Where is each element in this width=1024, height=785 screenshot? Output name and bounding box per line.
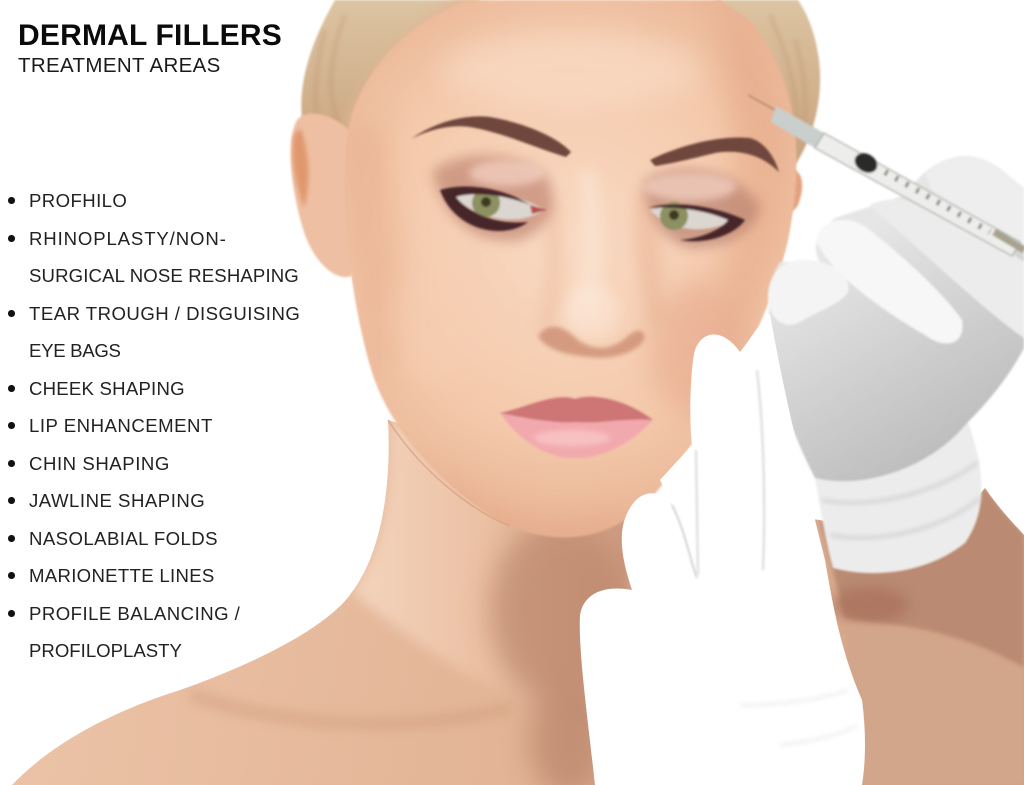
lower gloved hand	[580, 314, 865, 785]
title block	[18, 19, 282, 77]
list item: Lip enhancement: LIP ENHANCEMENT	[29, 415, 213, 436]
ear	[291, 114, 358, 277]
treatment areas list	[8, 190, 300, 661]
right eye makeup	[644, 169, 760, 248]
index finger	[816, 220, 962, 343]
list item: Chin shaping: CHIN SHAPING	[29, 453, 170, 474]
list item: Marionette lines: MARIONETTE LINES	[29, 565, 215, 586]
glove wrinkles	[740, 690, 858, 745]
list item: Rhinoplasty: RHINOPLASTY/NON-	[29, 228, 227, 249]
hair	[301, 0, 820, 165]
middle finger	[870, 200, 1024, 338]
treatment areas list: PROFILOPLASTY	[29, 640, 182, 661]
right eye	[648, 202, 745, 241]
nose	[538, 284, 644, 358]
treatment areas list: EYE BAGS	[29, 340, 121, 361]
lips	[500, 397, 653, 458]
left eye	[440, 186, 547, 231]
right ear	[780, 170, 802, 212]
heading: DERMAL FILLERS	[18, 19, 282, 52]
jaw line	[388, 420, 510, 526]
cuff	[815, 422, 982, 573]
list item: Profile balancing: PROFILE BALANCING /	[29, 603, 240, 624]
eyebrows	[411, 116, 779, 172]
upper gloved hand	[768, 156, 1024, 573]
body: neck, shoulders and chest	[12, 420, 1024, 785]
top finger	[925, 157, 1024, 245]
thumb	[768, 260, 849, 325]
left eye makeup	[432, 155, 553, 241]
list item: Profhilo: PROFHILO	[29, 190, 127, 211]
face	[344, 0, 796, 550]
list item: Tear trough: TEAR TROUGH / DISGUISING	[29, 303, 300, 324]
list item: Nasolabial folds: NASOLABIAL FOLDS	[29, 528, 218, 549]
syringe and needle	[748, 95, 1024, 256]
third finger shadow	[672, 505, 697, 578]
treatment areas list: SURGICAL NOSE RESHAPING	[29, 265, 299, 286]
cuff folds	[822, 462, 980, 538]
palm	[769, 156, 1024, 481]
subheading: TREATMENT AREAS	[18, 54, 221, 77]
list item: Cheek shaping: CHEEK SHAPING	[29, 378, 185, 399]
finger separators	[696, 370, 764, 575]
ear shading	[293, 128, 308, 208]
list item: Jawline shaping: JAWLINE SHAPING	[29, 490, 205, 511]
